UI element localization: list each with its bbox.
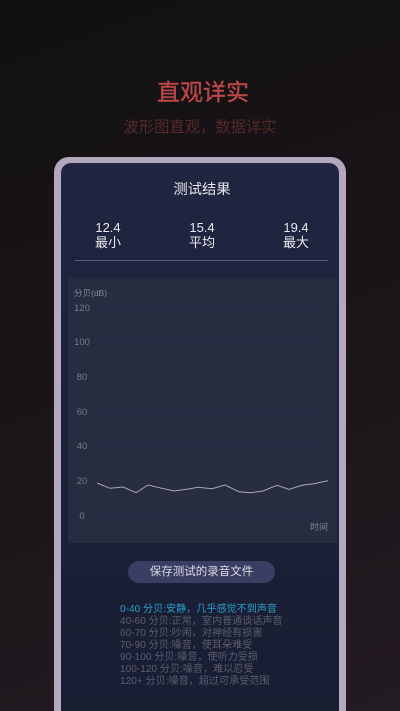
chart background [68,278,337,543]
y axis labels: 100 [74,337,90,348]
y axis labels: 0 [79,511,85,522]
y axis labels [74,303,90,522]
legend: normal: 40-60 分贝:正常，室内普通谈话声音 [120,616,283,627]
phone frame [54,157,346,711]
save recording button [128,561,275,583]
stat: maximum [283,220,309,250]
subtitle: 波形图直观，数据详实 [124,119,276,136]
legend: noisy: 60-70 分贝:吵闹，对神经有损害 [120,628,262,639]
stat: minimum [95,220,121,250]
decibel legend [120,603,283,687]
legend: noise 90-100: 90-100 分贝:噪音，使听力受损 [120,652,258,663]
waveform line chart [68,278,337,543]
stat: maximum: 19.4 [283,220,309,235]
stat: minimum: 最小 [95,235,121,250]
legend: noise 100-120: 100-120 分贝:噪音，难以忍受 [120,664,254,675]
screen heading: 测试结果 [173,182,231,198]
phone screen [61,163,339,711]
stats divider [75,260,328,261]
stat: average [189,220,215,250]
save recording button: 保存测试的录音文件 [150,566,253,578]
y axis title: 分贝(dB) [74,288,107,298]
stat: average: 平均 [189,235,215,250]
legend: quiet, highlighted: 0-40 分贝:安静，几乎感觉不到声音 [120,604,277,615]
y axis labels: 20 [77,476,87,487]
legend: noise 70-90: 70-90 分贝:噪音，使耳朵难受 [120,640,252,651]
x axis label: 时间 [310,521,328,532]
y axis labels: 80 [77,372,87,383]
y axis labels: 60 [77,407,87,418]
stat: maximum: 最大 [283,235,309,250]
y axis labels: 120 [74,303,90,314]
y axis labels: 40 [77,441,87,452]
legend: noise 120+: 120+ 分贝:噪音，超过可承受范围 [120,676,269,687]
stat: average: 15.4 [189,220,215,235]
title: 直观详实 [157,79,249,105]
stat: minimum: 12.4 [95,220,121,235]
decibel waveform [97,481,328,493]
